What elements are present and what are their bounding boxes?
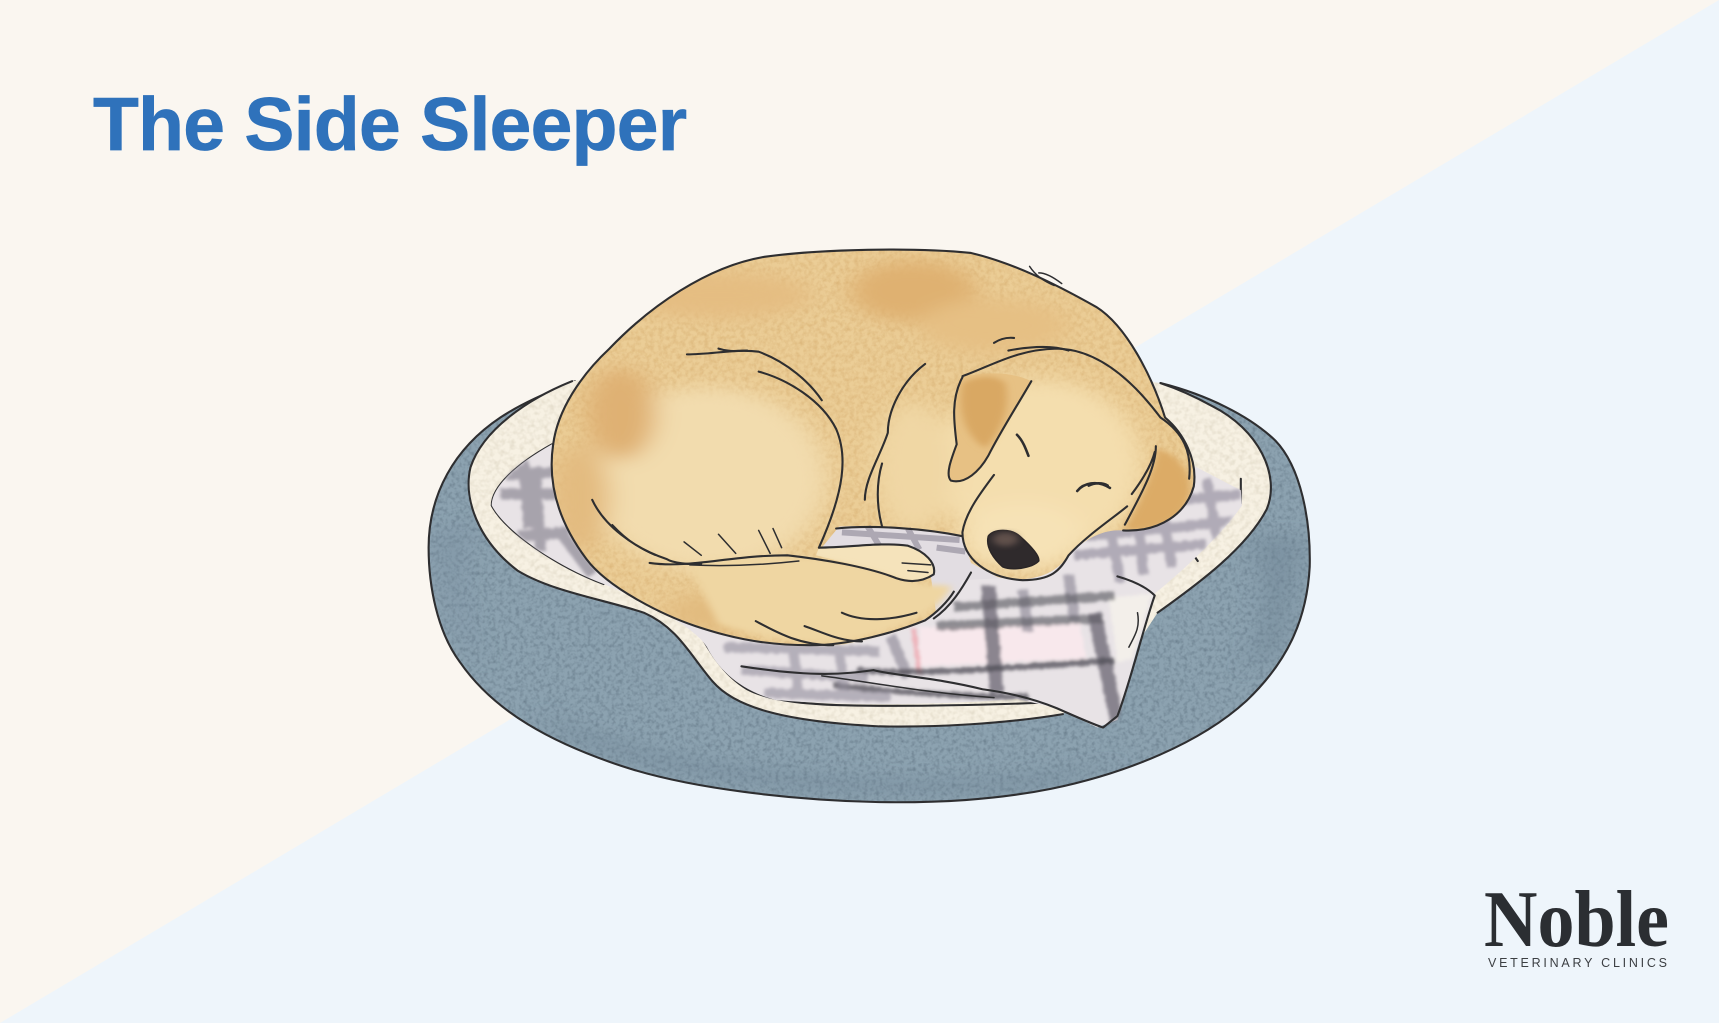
title: The Side Sleeper: [93, 82, 687, 166]
dog: [552, 250, 1194, 645]
near ear: [949, 373, 1031, 481]
bed outer outline: [429, 381, 1310, 802]
muzzle and far ear edge: [1125, 446, 1156, 525]
dog bed: outer blue cushion: [429, 381, 1310, 802]
head top and ear lines: [994, 338, 1014, 343]
logo tagline: VETERINARY CLINICS: [1488, 956, 1667, 970]
far ear patch: [1123, 448, 1190, 531]
foreleg lines: [865, 364, 925, 500]
closed eyes: [1017, 435, 1028, 456]
dog bed: cream inner rim: [469, 345, 1271, 727]
tail lines: [756, 621, 833, 645]
dog nose: [988, 530, 1039, 569]
front paw and tail: [690, 544, 951, 643]
dog outline: [553, 250, 1194, 531]
leg and paw lines: [650, 544, 934, 581]
plaid blanket: [492, 429, 1242, 728]
blanket outlines: [741, 576, 1155, 728]
bed shading: [582, 536, 1300, 790]
haunch lines: [687, 351, 822, 400]
rear fur marks: [592, 500, 701, 564]
dog body: [552, 250, 1194, 645]
rim outlines: [469, 381, 1271, 727]
plaid stripes: [500, 460, 1241, 724]
logo: Noble Veterinary Clinics: [1484, 876, 1669, 970]
illustration: dog sleeping on its side in a bed: [429, 250, 1310, 802]
dog colour washes: [552, 261, 1190, 632]
dog line work: [552, 250, 1194, 645]
blanket fold over the leg: [822, 526, 1000, 618]
logo wordmark: Noble: [1484, 876, 1669, 964]
